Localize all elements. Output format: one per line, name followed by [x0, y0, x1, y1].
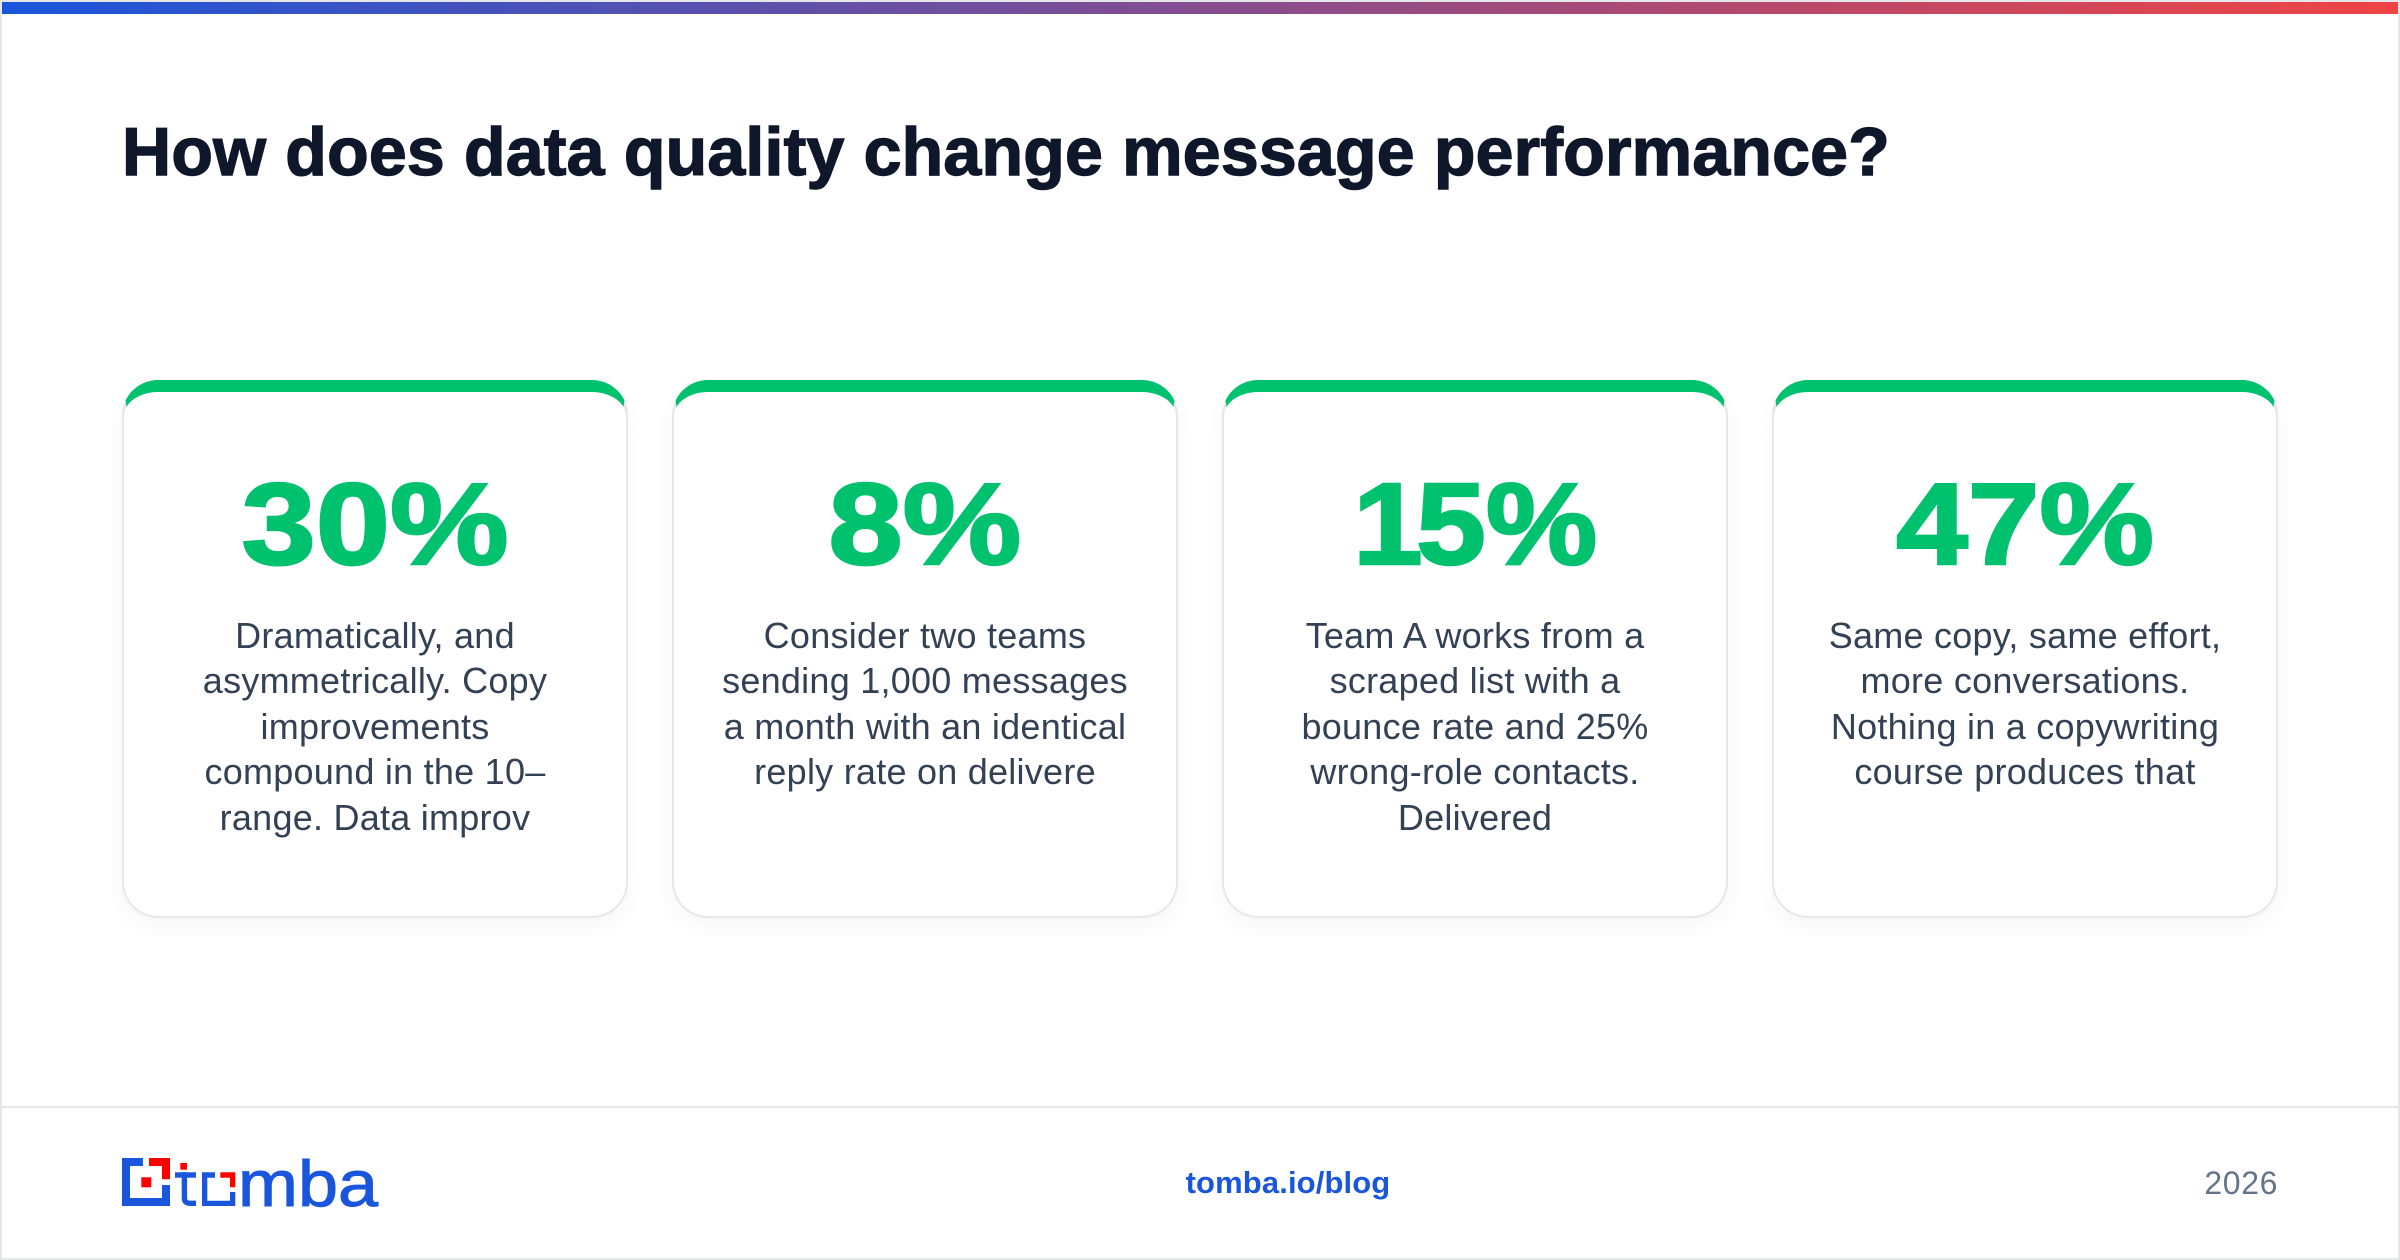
logo: tomba: [122, 1150, 379, 1214]
text: card 2 description: reply rate on delivere: [754, 751, 1096, 792]
footer divider: [2, 1106, 2398, 1108]
text: card 1 description: Dramatically, and: [235, 614, 515, 656]
panel: card 2 background: [672, 380, 1178, 918]
text: card 1 description: [203, 614, 547, 838]
stat: 8%: 8%: [829, 459, 1021, 589]
text: card 1 description: range. Data improv: [220, 797, 530, 838]
text: card 4 description: course produces that: [1854, 751, 2196, 792]
top gradient bar: [2, 2, 2398, 14]
footer year: 2026: [2204, 1165, 2278, 1201]
stat: 47%: 47%: [1896, 459, 2154, 589]
stat: 15%: 15%: [1353, 459, 1597, 589]
text: card 3 description: bounce rate and 25%: [1301, 706, 1648, 747]
footer link: tomba.io/blog: [1186, 1165, 1390, 1200]
panel: card 1 background: [122, 380, 628, 918]
text: card 4 description: [1829, 614, 2221, 792]
panel: card 3 background: [1222, 380, 1728, 918]
title: How does data quality change message performance?: [122, 114, 1890, 190]
text: card 4 description: more conversations.: [1861, 660, 2189, 701]
text: card 3 description: Team A works from a: [1306, 614, 1644, 656]
text: card 2 description: a month with an identical: [724, 706, 1126, 747]
text: card 3 description: [1301, 614, 1648, 838]
text: card 2 description: Consider two teams: [764, 614, 1086, 656]
text: card 2 description: [722, 614, 1128, 792]
text: card 3 description: Delivered: [1398, 797, 1552, 838]
text: card 3 description: wrong-role contacts.: [1310, 751, 1640, 792]
text: card 4 description: Nothing in a copywriting: [1831, 706, 2219, 747]
text: card 1 description: compound in the 10–: [204, 751, 546, 792]
stat: 30%: 30%: [241, 459, 508, 589]
text: card 4 description: Same copy, same effort,: [1829, 614, 2221, 656]
text: card 1 description: asymmetrically. Copy: [203, 660, 547, 701]
text: card 3 description: scraped list with a: [1330, 660, 1620, 701]
text: card 2 description: sending 1,000 messages: [722, 660, 1128, 701]
panel: card 4 background: [1772, 380, 2278, 918]
text: card 1 description: improvements: [260, 706, 490, 747]
